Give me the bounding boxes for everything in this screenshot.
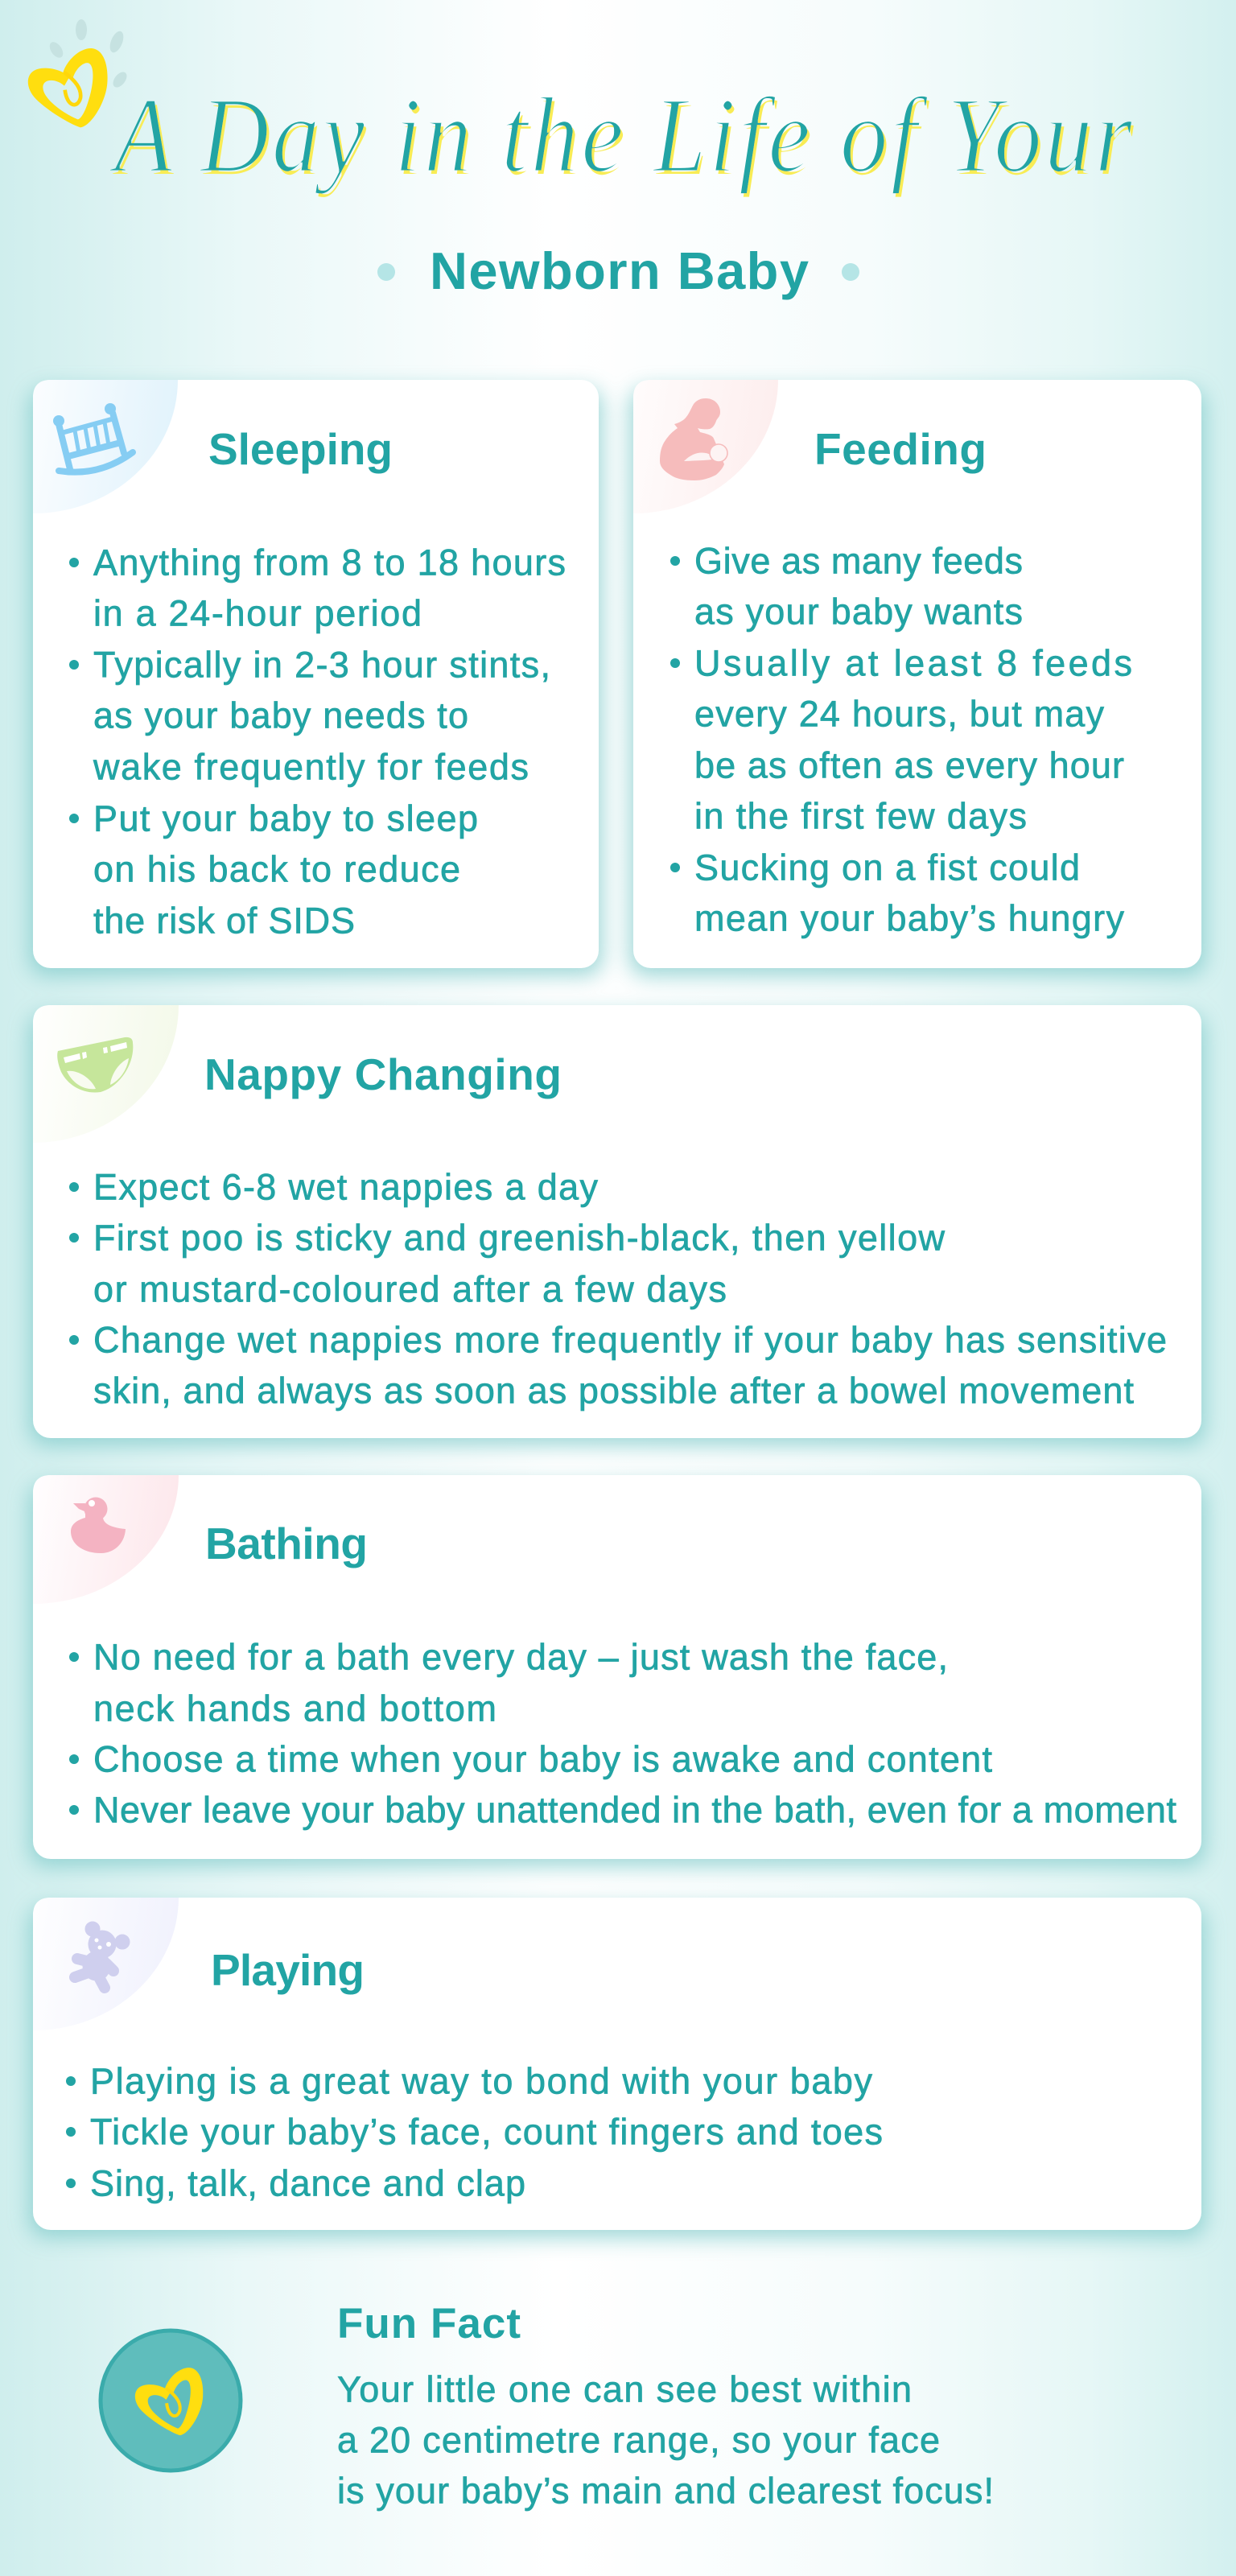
icon: teddy bear: [75, 1922, 130, 1988]
logo: yellow heart with rays: [28, 19, 130, 127]
list: feeding facts: be as often as every hour: [694, 745, 1124, 785]
panel: feeding: [633, 380, 1201, 968]
list: nappy facts: Expect 6-8 wet nappies a day: [93, 1167, 599, 1207]
list: sleeping facts: on his back to reduce: [93, 848, 460, 890]
list: feeding facts: in the first few days: [694, 795, 1027, 837]
icon: rubber duck: [71, 1497, 126, 1553]
icon: mother nursing baby: [660, 398, 727, 480]
list: bathing facts: [69, 1637, 1176, 1830]
list: feeding facts: as your baby wants: [694, 591, 1023, 633]
list: nappy facts: First poo is sticky and greenish-black, then yellow: [93, 1217, 945, 1259]
fun fact text: is your baby’s main and clearest focus!: [337, 2471, 994, 2511]
list: nappy facts: skin, and always as soon as possible after a bowel movement: [93, 1370, 1134, 1412]
list: sleeping facts: Typically in 2-3 hour stints,: [93, 644, 550, 686]
list: bathing facts: neck hands and bottom: [93, 1688, 496, 1729]
list: feeding facts: [670, 541, 1132, 938]
list: feeding facts: Give as many feeds: [694, 541, 1023, 581]
fun fact text: a 20 centimetre range, so your face: [337, 2419, 940, 2461]
list: sleeping facts: Anything from 8 to 18 hours: [93, 542, 566, 583]
title: A Day in the Life of Your: [109, 76, 1133, 196]
list: bathing facts: Choose a time when your baby is awake and content: [93, 1738, 992, 1780]
fun fact text: Fun Fact: [337, 2300, 521, 2347]
panel: bathing: [33, 1475, 1201, 1859]
list: playing facts: Sing, talk, dance and clap: [90, 2163, 525, 2203]
icon: nappy: [57, 1037, 133, 1093]
fun fact text: Your little one can see best within: [337, 2369, 912, 2409]
list: feeding facts: Sucking on a fist could: [694, 847, 1080, 888]
list: bathing facts: No need for a bath every day – just wash the face,: [93, 1637, 948, 1677]
panel: playing: [33, 1898, 1201, 2230]
list: playing facts: [66, 2060, 883, 2203]
list: bathing facts: Never leave your baby unattended in the bath, even for a moment: [93, 1790, 1176, 1830]
heading: Nappy Changing: Nappy Changing: [204, 1049, 562, 1099]
heading: Playing: Playing: [211, 1945, 365, 1995]
fun fact text: [337, 2300, 994, 2511]
list: sleeping facts: Put your baby to sleep: [93, 798, 478, 839]
list: playing facts: Playing is a great way to bond with your baby: [90, 2060, 872, 2102]
heading: Feeding: Feeding: [814, 424, 987, 474]
icon: fun fact heart badge: [101, 2331, 241, 2471]
panel: nappy changing: [33, 1005, 1201, 1438]
heading: Sleeping: Sleeping: [208, 424, 393, 474]
list: nappy facts: Change wet nappies more frequently if your baby has sensitive: [93, 1320, 1167, 1360]
list: sleeping facts: [69, 542, 566, 942]
panel: sleeping: [33, 380, 599, 968]
list: playing facts: Tickle your baby’s face, count fingers and toes: [90, 2112, 883, 2152]
list: sleeping facts: wake frequently for feeds: [93, 747, 529, 787]
list: feeding facts: mean your baby’s hungry: [694, 898, 1125, 938]
card shadows: [29, 388, 1205, 2238]
list: sleeping facts: as your baby needs to: [93, 695, 468, 736]
icon: cradle: [53, 403, 133, 472]
list: feeding facts: every 24 hours, but may: [694, 694, 1104, 734]
list: sleeping facts: the risk of SIDS: [93, 900, 355, 942]
subtitle: Newborn Baby: Newborn Baby: [430, 241, 809, 300]
list: feeding facts: Usually at least 8 feeds: [694, 642, 1132, 684]
list: nappy facts: [69, 1167, 1167, 1412]
heading: Bathing: Bathing: [205, 1519, 368, 1568]
list: sleeping facts: in a 24-hour period: [93, 592, 422, 634]
list: nappy facts: or mustard-coloured after a few days: [93, 1268, 727, 1310]
